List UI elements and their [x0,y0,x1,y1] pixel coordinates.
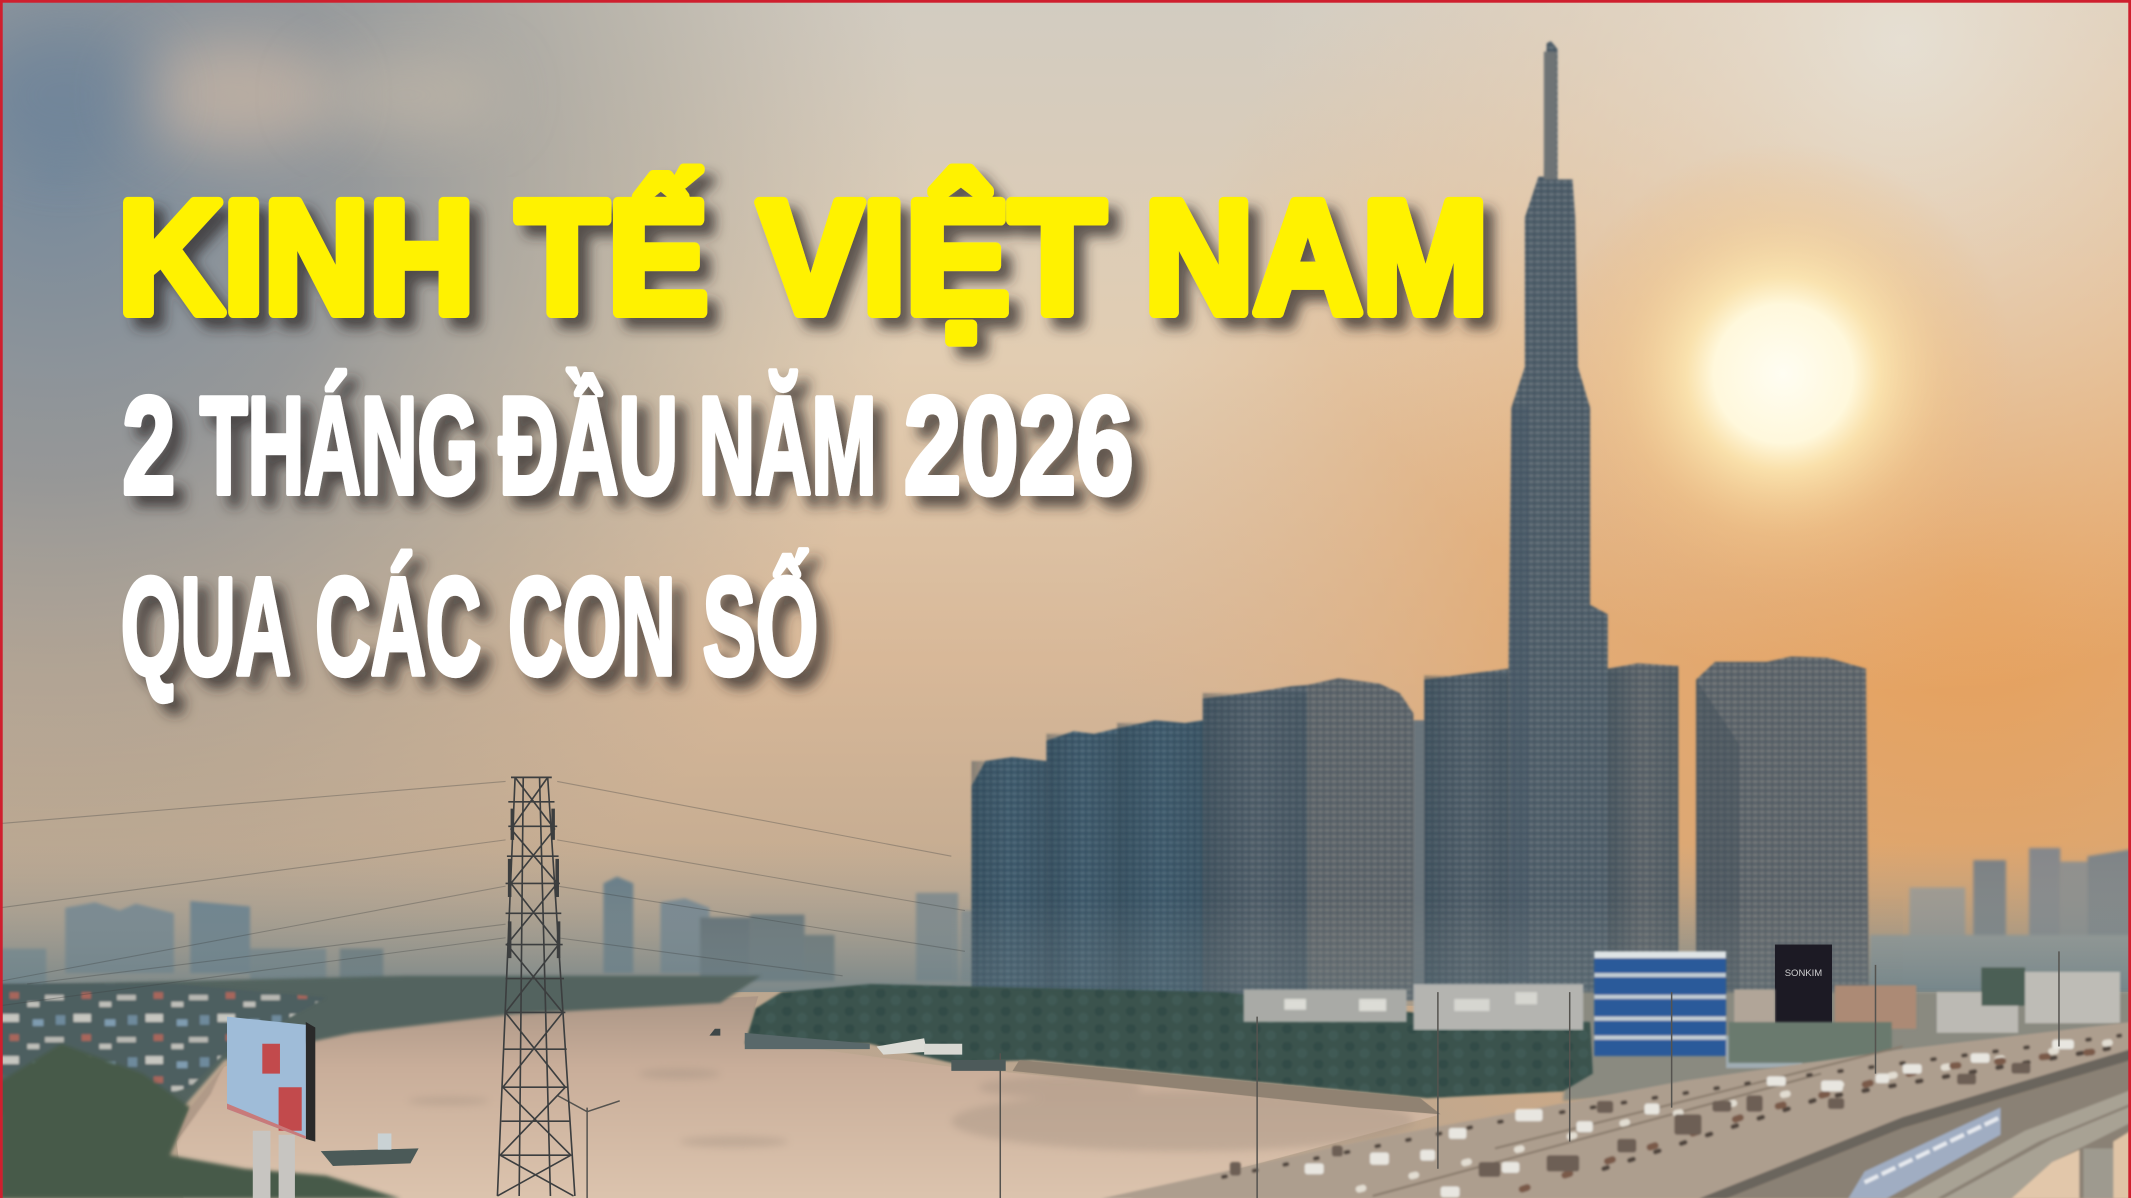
subtitle: qua các con số [121,548,818,704]
Landmark 81 tower [1509,41,1608,1000]
subtitle: 2 tháng đầu năm 2026: 2026 [904,369,1133,523]
power pylon and lines [0,777,965,1196]
subtitle: 2 tháng đầu năm 2026: 2 [122,369,175,523]
highway and metro viaduct [1101,1022,2131,1198]
shaded building columns [972,761,1046,1000]
haze band [0,843,2131,992]
title: Kinh tế Việt Nam: TẾ [516,168,708,347]
subtitle: 2 tháng đầu năm 2026 [122,368,1133,523]
blue office building [1594,951,1802,1068]
title: Kinh tế Việt Nam: NAM [1144,168,1488,347]
river [177,996,1441,1198]
distant skyline right [1870,848,2131,1046]
right tower [1696,656,1869,999]
far river bank treeline [0,976,761,1114]
subtitle: qua các con số: CON [508,550,675,704]
subtitle: 2 tháng đầu năm 2026: ĐẦU [499,368,678,523]
Sonkim billboard [1775,945,1832,1026]
Sonkim billboard: SONKIM [1785,968,1822,979]
riverside ground behind road [1563,992,2131,1101]
villas [1244,984,1583,1030]
subtitle: qua các con số: QUA [121,550,291,704]
traffic [1223,1036,2120,1189]
far bank with trees [745,984,1593,1098]
building blocks left [972,757,1046,1000]
distant skyline left [0,877,973,992]
low haze over tower bases [951,897,1903,1006]
street lamps [557,951,2059,1198]
billboard left [227,1017,315,1198]
subtitle: 2 tháng đầu năm 2026: NĂM [699,369,877,523]
left bank city and greenery [0,984,401,1198]
title: Kinh tế Việt Nam: VIỆT [758,168,1105,347]
sun [1552,143,2014,605]
subtitle: qua các con số: SỐ [703,548,818,704]
title: Kinh tế Việt Nam: KINH [118,168,474,347]
title: Kinh tế Việt Nam [118,168,1488,347]
subtitle: 2 tháng đầu năm 2026: THÁNG [200,369,478,523]
right side roadside buildings [1729,968,2120,1063]
subtitle: qua các con số: CÁC [315,550,481,704]
river surface reflections [408,1068,1413,1151]
landmark skyscraper cluster [972,41,1869,1000]
boat and buoys on river [321,1029,1006,1166]
